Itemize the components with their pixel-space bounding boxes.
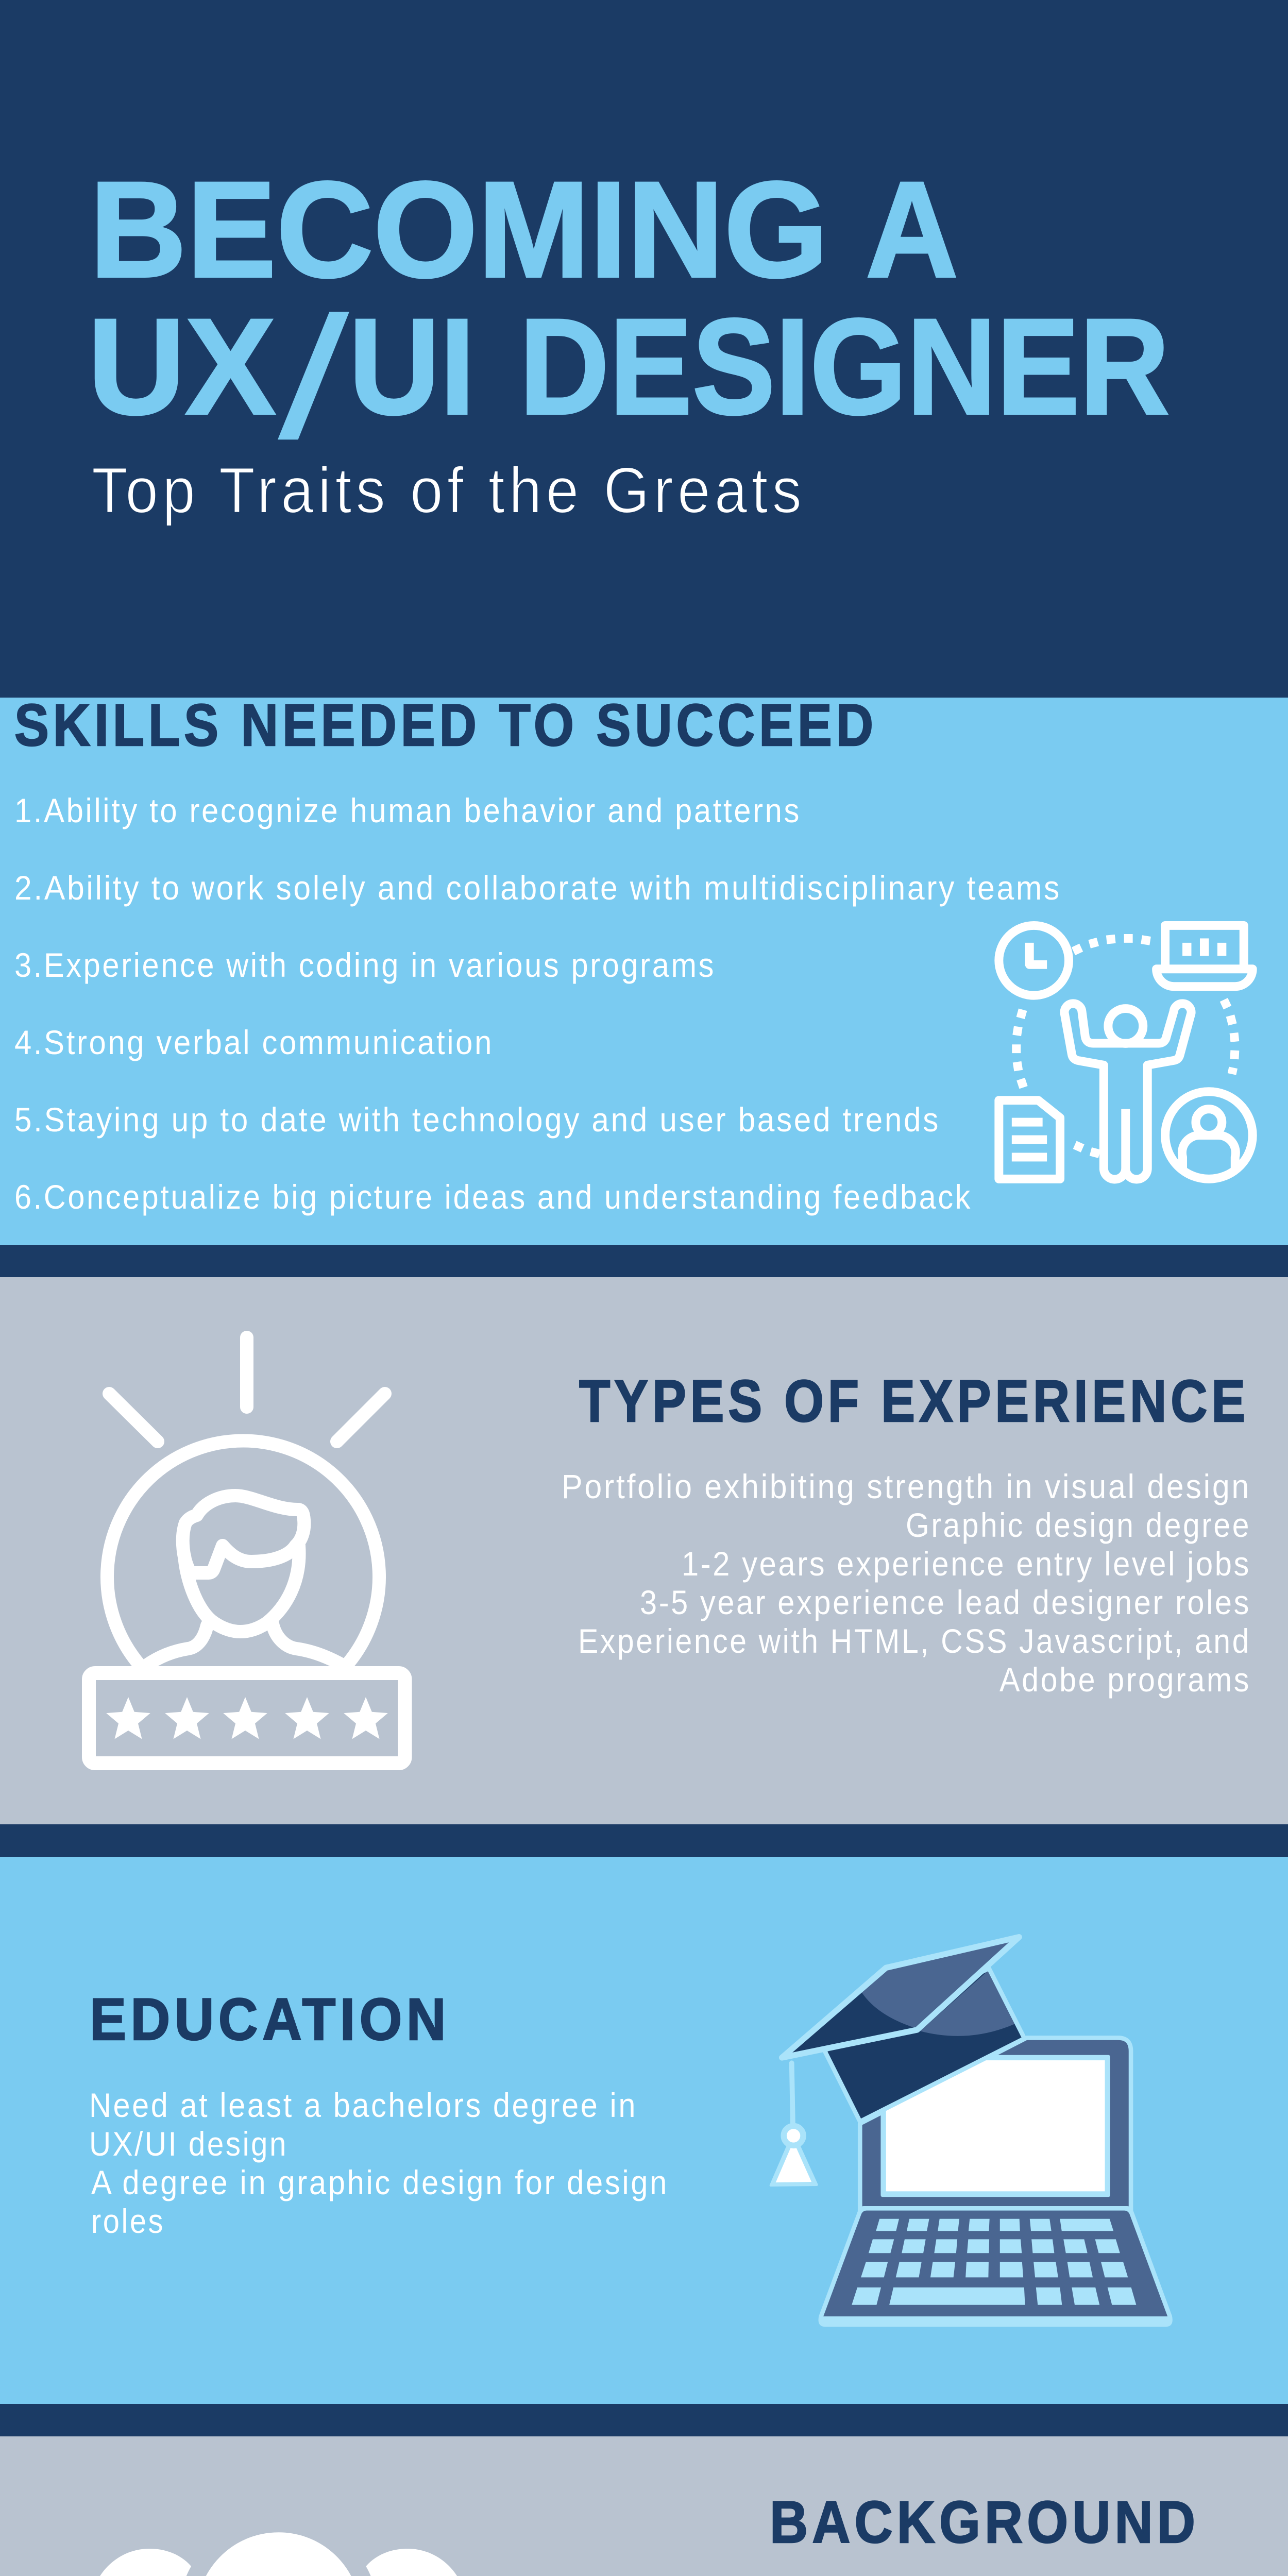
icon: left person: [39, 2549, 221, 2576]
icon: rays: [109, 1337, 385, 1442]
icon: rating box: [89, 1673, 405, 1763]
icon: centre person: [126, 2532, 431, 2576]
education text: A degree in graphic design for design: [91, 2163, 669, 2201]
subtitle: Top Traits of the Greats: [92, 455, 806, 527]
experience list: Adobe programs: [999, 1660, 1251, 1699]
education text: roles: [91, 2202, 165, 2240]
skills list: 6.Conceptualize big picture ideas and understanding feedback: [14, 1178, 972, 1216]
icon: clock: [999, 925, 1069, 995]
skills list: 5.Staying up to date with technology and user based trends: [14, 1100, 940, 1139]
icon: laptop base: [819, 2206, 1173, 2327]
icon: halo circle: [107, 1441, 379, 1666]
panel: education: [0, 1857, 1288, 2404]
panel: background: [0, 2436, 1288, 2576]
icon: head and hair: [183, 1496, 304, 1573]
panel: types of experience: [0, 1277, 1288, 1824]
education text: UX/UI design: [89, 2125, 288, 2163]
icon: group of people: [39, 2532, 518, 2576]
skills list: 3.Experience with coding in various programs: [14, 946, 716, 984]
panel: skills needed to succeed: [0, 692, 1288, 1245]
experience list: Portfolio exhibiting strength in visual design: [562, 1467, 1251, 1505]
heading: education: EDUCATION: [90, 1987, 450, 2053]
icon: cap skull band: [824, 1969, 1024, 2122]
icon: keyboard keys: [852, 2219, 1136, 2305]
title: [88, 154, 1170, 475]
icon: person with clock, laptop, document and profile: [999, 925, 1252, 1179]
panel: title header: [0, 0, 1288, 698]
title: UI: [349, 291, 475, 443]
title: /: [278, 280, 350, 475]
title: DESIGNER: [519, 291, 1170, 443]
icon: laptop: [1157, 925, 1252, 987]
education text: [89, 2086, 669, 2240]
icon: cap board: [782, 1937, 1019, 2058]
title: UX: [88, 291, 276, 443]
icon: profile circle: [1165, 1092, 1252, 1179]
experience list: Graphic design degree: [906, 1506, 1251, 1544]
heading: skills: SKILLS NEEDED TO SUCCEED: [14, 692, 877, 758]
icon: tassel: [771, 2063, 817, 2185]
title: BECOMING: [90, 154, 828, 306]
icon: graduation cap on laptop: [771, 1937, 1173, 2327]
heading: background: BACKGROUND: [770, 2489, 1199, 2555]
icon: document: [999, 1100, 1060, 1179]
skills list: 1.Ability to recognize human behavior and patterns: [14, 791, 801, 829]
skills list: 2.Ability to work solely and collaborate with multidisciplinary teams: [14, 869, 1061, 907]
icon: five stars: [106, 1697, 388, 1739]
icon: laptop screen: [860, 2038, 1131, 2212]
skills list: 4.Strong verbal communication: [14, 1023, 494, 1061]
icon: shoulders: [147, 1624, 343, 1665]
icon: dotted connectors: [1016, 938, 1235, 1154]
skills list: [14, 791, 1061, 1216]
icon: right person: [336, 2549, 518, 2576]
icon: rated person: [89, 1337, 405, 1763]
education text: Need at least a bachelors degree in: [89, 2086, 637, 2124]
title: A: [866, 154, 958, 306]
icon: person raising arms: [1064, 1004, 1191, 1179]
experience list: [562, 1467, 1251, 1699]
